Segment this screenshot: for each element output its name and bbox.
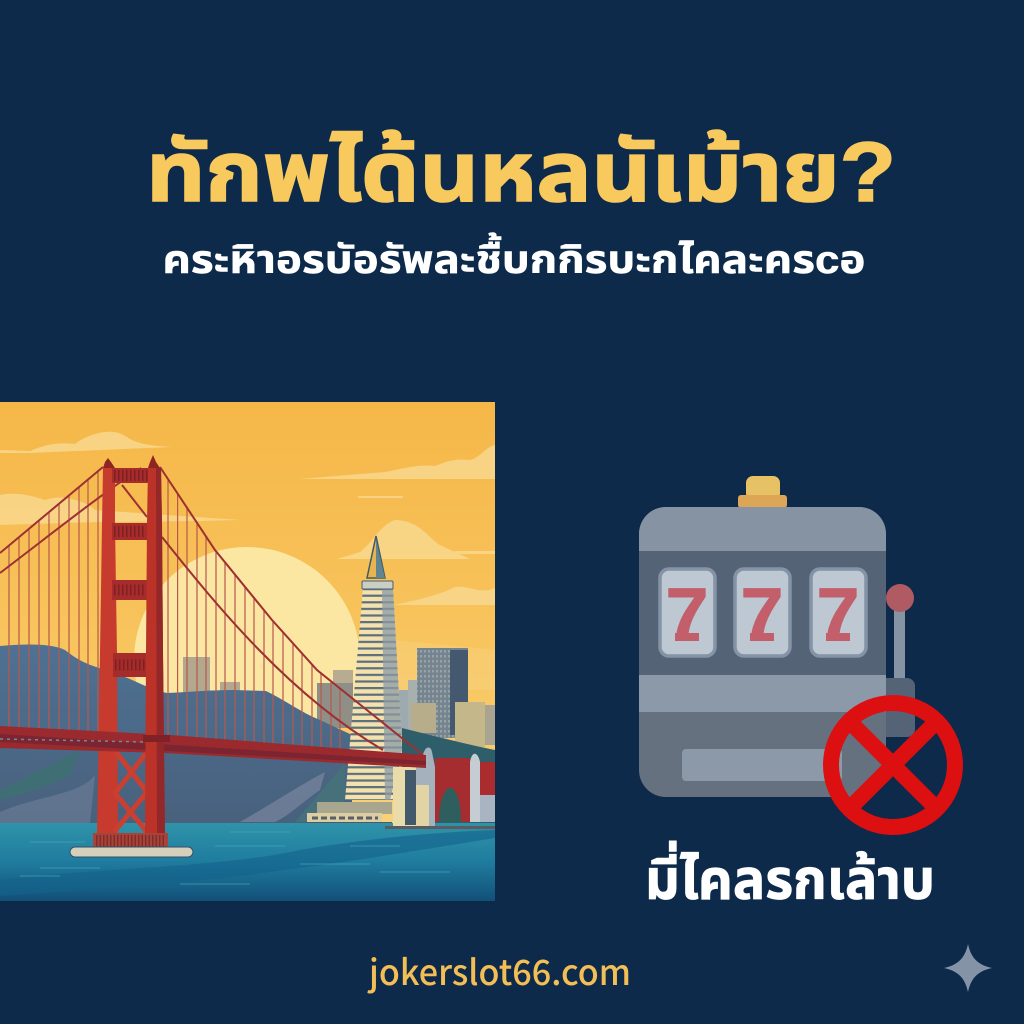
bridge tower and deck: [0, 455, 426, 857]
water ripples: [20, 832, 450, 884]
reel 3: 7: [816, 573, 860, 656]
bay water: [0, 823, 495, 901]
transamerica pyramid: [345, 536, 402, 800]
reel 1: 7: [666, 573, 708, 656]
waterfront building: [307, 802, 392, 824]
tower pier: [93, 833, 168, 846]
tower cross bracing: [118, 752, 146, 833]
caption: มี่ไคลรกเล้าบ: [645, 840, 935, 911]
sky: [0, 402, 495, 832]
right tower leg: [145, 468, 165, 833]
reel 2: 7: [740, 573, 784, 656]
icon: slot machine: [639, 476, 915, 797]
subtitle: คระหิาอรบัอรัพละชื้บกกิรบะกไคละครcอ: [162, 232, 866, 282]
lever: [870, 584, 915, 737]
bridge approach: [385, 748, 495, 829]
clouds: [0, 432, 495, 690]
sun: [134, 547, 358, 719]
title: ทักพได้นหลนัเม้าย?: [146, 125, 896, 219]
bridge deck: [0, 726, 426, 768]
suspender cables: [9, 471, 340, 752]
main cables: [0, 467, 423, 755]
distant buildings: [183, 648, 495, 747]
icon: sparkle: [944, 944, 992, 992]
icon: prohibition sign: [831, 703, 955, 827]
panel: golden gate bridge illustration: [0, 402, 495, 901]
tower struts: [112, 468, 150, 677]
hills: [0, 645, 352, 823]
website url: jokerslot66.com: [367, 945, 631, 996]
left tower leg: [97, 468, 118, 833]
top button: [738, 476, 787, 508]
machine body: [639, 507, 886, 797]
